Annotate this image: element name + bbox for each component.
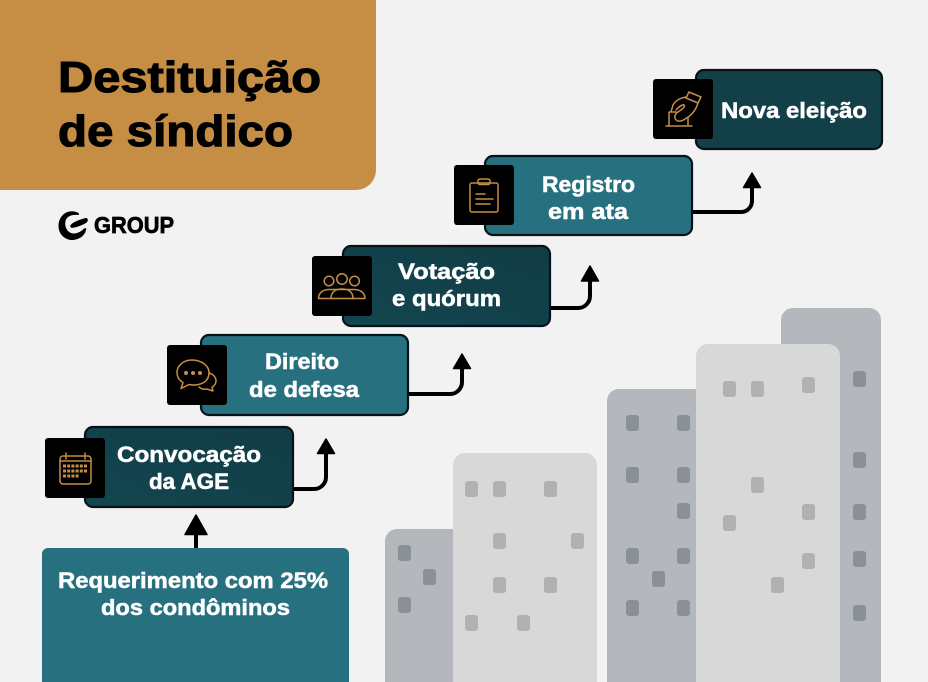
building 3 (607, 389, 699, 682)
title (58, 53, 321, 156)
step 2: direito de defesa: de defesa (249, 377, 360, 402)
icon: chat bubbles (167, 345, 227, 405)
title: Destituição (58, 53, 321, 102)
logo: C Group: GROUP (94, 212, 174, 238)
step 5: nova eleição (653, 70, 882, 149)
step 3: votação e quórum: e quórum (392, 286, 501, 311)
building 4 (696, 344, 840, 682)
panel: requerimento (42, 548, 349, 682)
icon: hand voting (653, 79, 713, 139)
title: de síndico (58, 107, 293, 156)
logo: C Group (58, 211, 174, 240)
step 2: direito de defesa: Direito (265, 349, 339, 374)
building 5 (781, 308, 881, 682)
building 1 (385, 529, 457, 682)
arrow: step 3 to step 4 (551, 266, 598, 308)
panel: requerimento: Requerimento com 25% (58, 568, 328, 593)
step 1: convocação: da AGE (149, 469, 229, 494)
step 2: direito de defesa (167, 335, 408, 415)
header panel (0, 0, 376, 190)
icon: calendar (45, 438, 105, 498)
arrow: step 4 to step 5 (693, 173, 760, 212)
arrow: step 1 to step 2 (293, 439, 334, 489)
icon: group of people (312, 256, 372, 316)
step 4: registro em ata: em ata (548, 199, 629, 224)
buildings skyline (385, 308, 881, 682)
step 4: registro em ata: Registro (542, 172, 635, 197)
step 5: nova eleição: Nova eleição (721, 98, 867, 123)
step 1: convocação (45, 427, 293, 507)
panel: requerimento: dos condôminos (101, 595, 290, 620)
step 3: votação e quórum (312, 246, 550, 326)
step 3: votação e quórum: Votação (398, 259, 495, 284)
icon: clipboard (454, 165, 514, 225)
building 2 (453, 453, 597, 682)
arrow: step 2 to step 3 (409, 354, 470, 394)
arrow: requerimento to convocação (185, 515, 207, 548)
step 1: convocação: Convocação (117, 442, 261, 467)
step 4: registro em ata (454, 156, 692, 235)
